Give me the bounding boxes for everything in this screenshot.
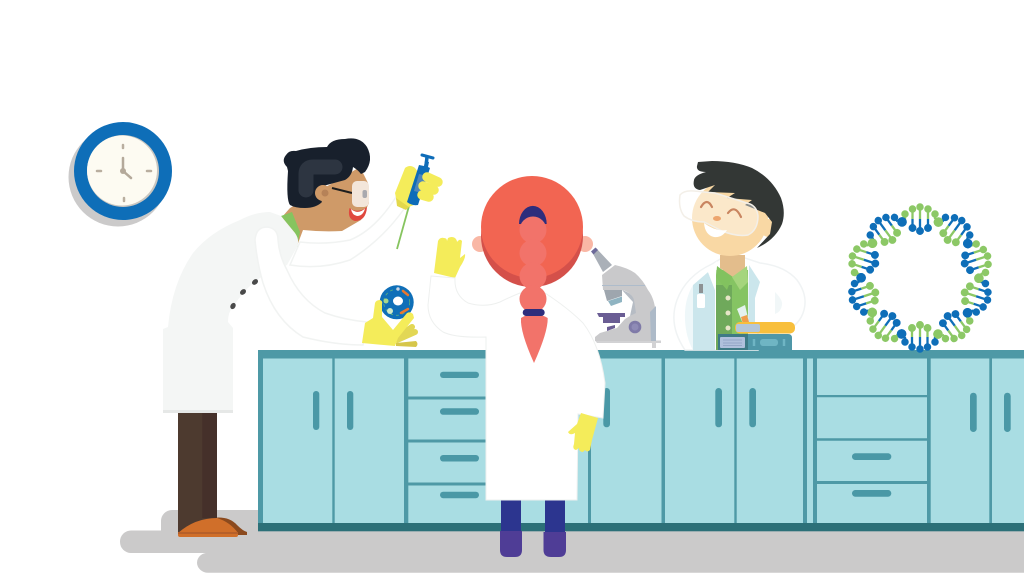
- shoes: [500, 531, 566, 557]
- wall clock: [68, 122, 172, 226]
- braid: [520, 216, 548, 363]
- hair tie: [519, 206, 547, 224]
- hair: [284, 138, 370, 208]
- white lab coat: [428, 276, 605, 500]
- hair highlight: [306, 167, 335, 190]
- glove holding petri dish: [362, 300, 418, 347]
- laughing mouth: [349, 207, 367, 221]
- microscope body: [595, 265, 656, 341]
- neck and face: [282, 167, 369, 246]
- raised glove: [434, 237, 465, 278]
- lapel shading: [693, 272, 715, 350]
- gloved hand behind pipette: [395, 166, 421, 208]
- gloved fingers on pipette: [422, 177, 438, 197]
- cabinet dividers: [332, 358, 992, 523]
- DNA ring: [843, 204, 997, 352]
- lab coat body: [163, 212, 298, 413]
- white lapel: [693, 261, 717, 290]
- coat pocket and pen: [697, 284, 705, 308]
- back arm holding pipette: [290, 197, 404, 267]
- lab counter with cabinets: [258, 350, 1024, 531]
- pipette: [407, 155, 433, 205]
- head: [680, 161, 784, 256]
- test tube: [737, 305, 749, 324]
- stage: [597, 313, 625, 323]
- smile: [704, 223, 727, 237]
- trousers: [178, 412, 217, 533]
- lowered glove: [568, 413, 598, 452]
- focus knob: [629, 321, 641, 333]
- hair bun: [481, 176, 583, 287]
- eyepiece: [592, 248, 612, 272]
- ear: [315, 185, 331, 201]
- pipette tip: [397, 206, 409, 249]
- braid band: [523, 309, 545, 316]
- stack of books: [718, 322, 795, 350]
- collar: [281, 212, 300, 247]
- lab coat: [674, 258, 805, 350]
- safety goggles: [332, 181, 369, 207]
- scientist from behind: [428, 176, 605, 557]
- goggles: [680, 191, 758, 236]
- ears: [472, 236, 593, 252]
- cabinet handles: [313, 372, 1011, 498]
- base plate: [595, 340, 661, 348]
- hair: [694, 161, 784, 248]
- coat buttons: [229, 278, 259, 310]
- shoe: [178, 517, 247, 537]
- microscope: [591, 248, 661, 348]
- trousers: [501, 498, 565, 532]
- scientist on the right: [674, 161, 805, 350]
- green shirt: [716, 255, 748, 350]
- sleeve shading: [685, 285, 693, 350]
- nosepiece and lenses: [604, 290, 622, 301]
- floor shadow: [120, 510, 1024, 573]
- scientist on the left with pipette: [163, 138, 438, 537]
- petri dish: [380, 285, 414, 319]
- front arm: [255, 227, 367, 345]
